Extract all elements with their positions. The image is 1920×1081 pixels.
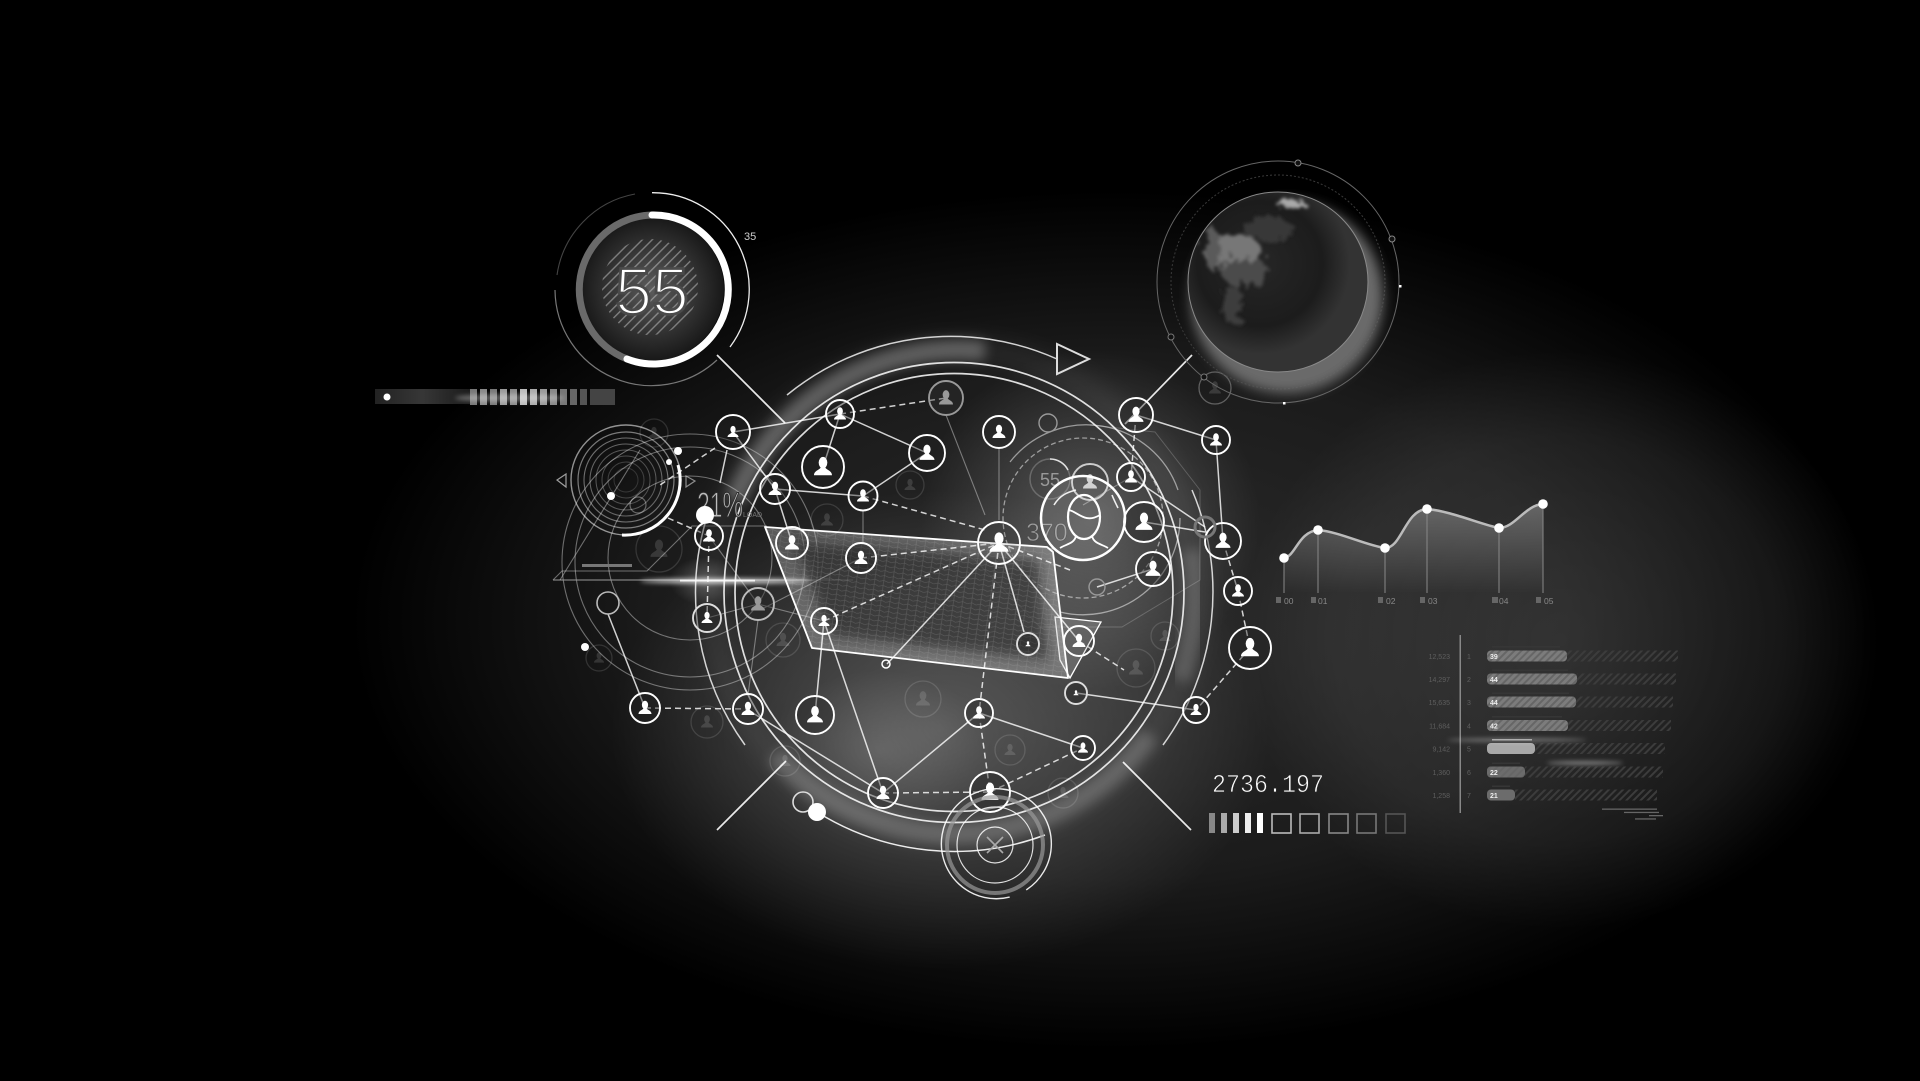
- dark hatch tracks: [1515, 650, 1678, 800]
- row index: 2: [1467, 677, 1471, 684]
- bar values: 44: [1490, 700, 1498, 707]
- chart axis labels: 03: [1428, 596, 1438, 606]
- bar values: 39: [1490, 654, 1498, 661]
- node dim: [929, 381, 963, 415]
- node: [965, 699, 993, 727]
- row totals: [1429, 654, 1450, 800]
- row index: 5: [1467, 746, 1471, 754]
- node: [983, 416, 1015, 448]
- empty node: [1039, 414, 1057, 432]
- faded background users: [586, 372, 1231, 808]
- node: [716, 415, 750, 449]
- readout tick bars: [1209, 813, 1405, 833]
- value bars: [1487, 650, 1577, 800]
- node: [693, 604, 721, 632]
- node small: [1017, 633, 1039, 655]
- node: [1202, 426, 1230, 454]
- row totals: 11,684: [1429, 724, 1450, 730]
- network user nodes: [597, 381, 1271, 812]
- chart axis labels: 05: [1544, 596, 1554, 606]
- bar values: [1490, 654, 1498, 800]
- node: [776, 527, 808, 559]
- white marker dots: [581, 447, 714, 651]
- chart axis labels: 01: [1318, 596, 1328, 606]
- node: [1136, 552, 1170, 586]
- empty node: [1072, 464, 1108, 500]
- node: [1183, 697, 1209, 723]
- orbit dots: [793, 792, 826, 821]
- row totals: 14,297: [1429, 677, 1450, 684]
- horizontal bar table: [1429, 635, 1678, 820]
- empty node: [882, 660, 890, 668]
- node: [978, 522, 1020, 564]
- load percentage readout: 21%: [697, 486, 743, 525]
- node: [1071, 736, 1095, 760]
- chart axis labels: 00: [1284, 596, 1294, 606]
- empty node: [597, 592, 619, 614]
- laptop: [760, 520, 1101, 685]
- small 55 gauge behind face: [1030, 459, 1070, 499]
- gauge side value: 35: [744, 231, 756, 243]
- node: [733, 694, 763, 724]
- node: [868, 778, 898, 808]
- globe: [1157, 160, 1402, 404]
- face avatar: [1041, 476, 1125, 560]
- node: [1124, 502, 1164, 542]
- horizontal lens flare left: [640, 557, 810, 605]
- chart axis labels: 04: [1499, 596, 1509, 606]
- row totals: 1,360: [1432, 770, 1450, 777]
- chart axis labels: 02: [1386, 596, 1396, 606]
- small 55 gauge behind face: 55: [1040, 470, 1060, 490]
- node: [970, 772, 1010, 812]
- row totals: 9,142: [1432, 746, 1450, 754]
- network connections: [608, 398, 1250, 793]
- node: [1205, 523, 1241, 559]
- small 370 value: 370: [1026, 519, 1068, 547]
- node: [1119, 398, 1153, 432]
- gauge value: 55: [615, 254, 689, 328]
- target radar circle: [557, 425, 695, 535]
- row index: 6: [1467, 770, 1471, 777]
- node: [1117, 463, 1145, 491]
- node: [846, 543, 876, 573]
- node: [1224, 577, 1252, 605]
- row totals: 1,258: [1432, 793, 1450, 800]
- node: [1229, 627, 1271, 669]
- numeric readout: 2736.197: [1212, 770, 1324, 800]
- node: [848, 482, 878, 510]
- node: [826, 400, 854, 428]
- empty node: [1195, 517, 1215, 537]
- row index: 1: [1467, 654, 1471, 661]
- big concentric rings: [696, 336, 1213, 851]
- bottom target: [938, 785, 1055, 902]
- row index: 3: [1467, 700, 1471, 707]
- gauge 55: [555, 193, 756, 386]
- small right HUD rings: [975, 425, 1200, 627]
- row totals: 12,523: [1429, 654, 1450, 661]
- chart axis labels: [1276, 596, 1554, 606]
- glow ring around network: [711, 349, 1197, 835]
- lens flares: [1447, 738, 1623, 764]
- node small: [1065, 682, 1087, 704]
- node: [630, 693, 660, 723]
- bar values: 22: [1490, 770, 1498, 777]
- node: [811, 608, 837, 634]
- node: [695, 522, 723, 550]
- node: [909, 435, 945, 471]
- bar values: 42: [1490, 724, 1498, 730]
- line chart: [1276, 499, 1554, 606]
- footer strokes: [1602, 808, 1663, 820]
- empty node: [1089, 579, 1105, 595]
- thin lines above bars: [1492, 646, 1569, 787]
- load percentage readout: LOAD: [743, 512, 762, 519]
- node: [760, 474, 790, 504]
- row totals: 15,635: [1429, 700, 1450, 707]
- node dim: [742, 588, 774, 620]
- bar values: 21: [1490, 793, 1498, 800]
- node: [802, 446, 844, 488]
- node: [796, 696, 834, 734]
- node: [1064, 626, 1094, 656]
- row index: [1467, 654, 1471, 800]
- bar values: 44: [1490, 677, 1498, 684]
- progress strip: [375, 389, 615, 405]
- left HUD frame: [553, 434, 853, 690]
- row index: 4: [1467, 724, 1471, 730]
- arrow triangle: [1057, 344, 1089, 374]
- gauge connector lines: [717, 355, 1192, 830]
- row index: 7: [1467, 793, 1471, 800]
